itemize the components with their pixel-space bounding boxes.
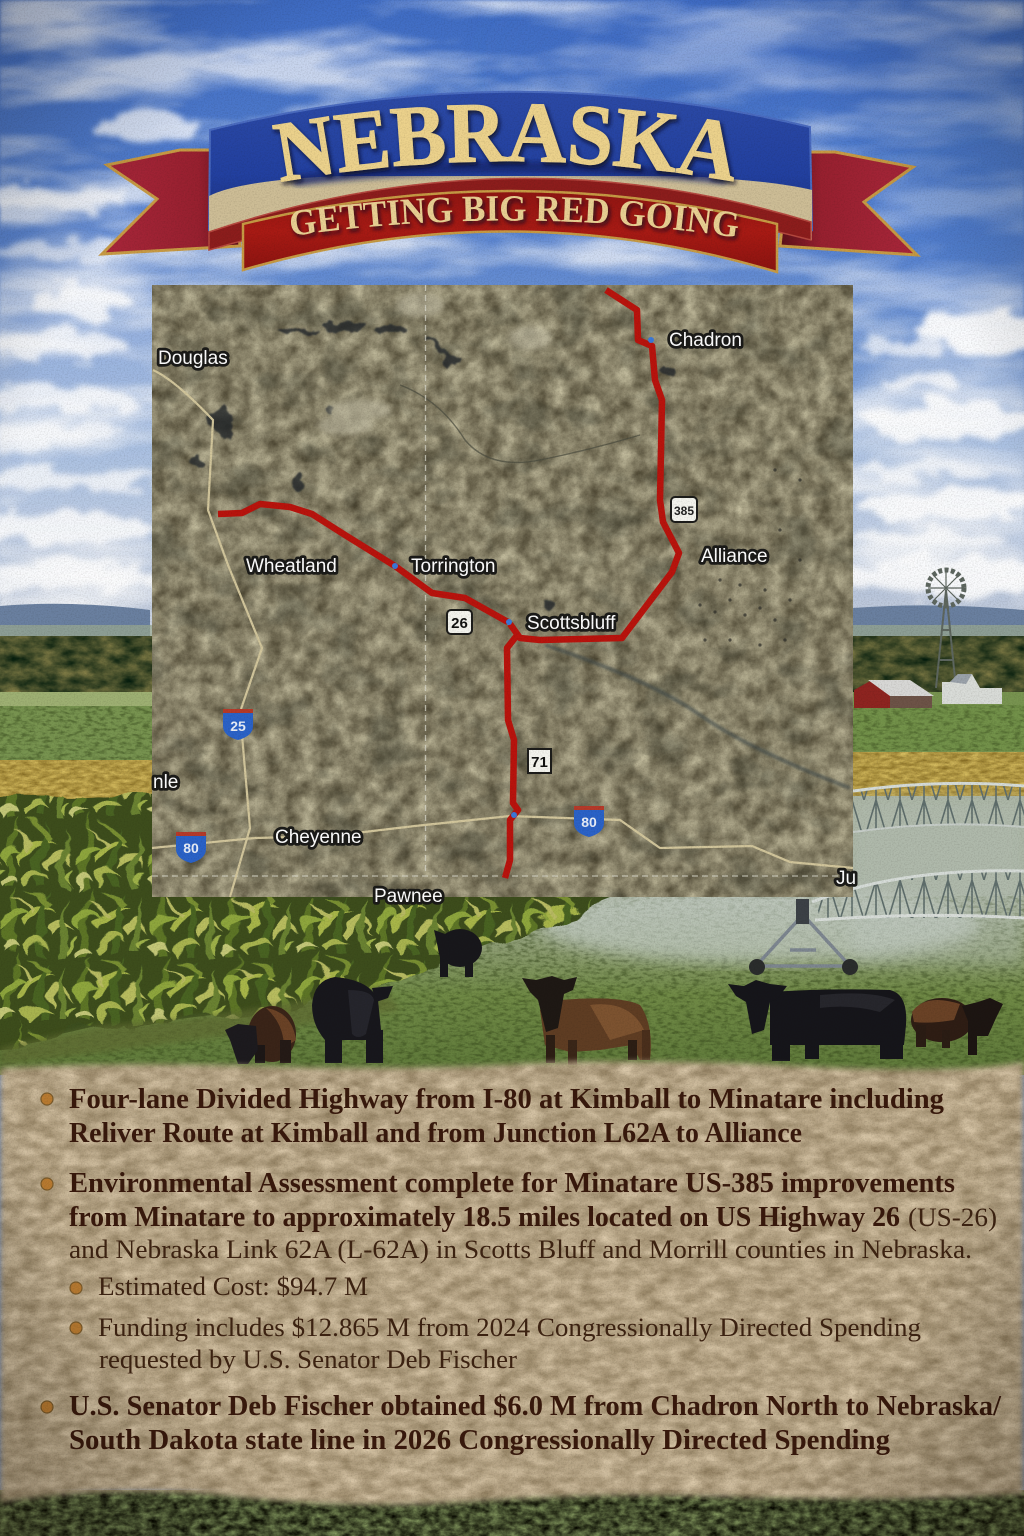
bullet marker [41,1401,53,1413]
small river line [400,385,640,462]
green field and wheat rows [0,692,1024,906]
light terrain patches [317,293,552,435]
text: four-lane highway line 2: Reliver Route at Kimball and from Junction L62A to Alliance [69,1118,802,1149]
shield: Nebraska 71 [528,749,551,773]
label: cropped at left: nle [153,772,178,793]
label: Wheatland: Wheatland [246,556,337,577]
icon: red barn [854,680,934,708]
shield: US-26 [447,610,472,634]
blue arched band [209,92,812,230]
shield: US-385: 385 [674,504,694,518]
distant hills [0,604,1024,640]
shield: US-385 [671,497,697,522]
icon: farmhouse [942,674,1002,704]
text: four-lane highway line 1: Four-lane Divided Highway from I-80 at Kimball to Minatare including [69,1084,944,1115]
near truss [812,870,1024,920]
red rim strip [209,178,811,250]
bottom grass strip [0,1490,1024,1536]
text: environmental assessment line 3: and Nebraska Link 62A (L-62A) in Scotts Bluff and Morrill counties in Nebraska. [69,1234,972,1264]
label: cropped Junction: Ju [836,868,856,889]
text: Fischer funding line 2: South Dakota state line in 2026 Congressionally Directed Spending [69,1425,890,1456]
cow: small brown calf [225,1006,296,1064]
far truss [853,783,1024,832]
bullet list item 1 [41,1084,944,1149]
center pivot irrigation [749,783,1024,975]
satellite terrain [152,285,853,897]
label: Scottsbluff: Scottsbluff [527,613,616,634]
shield: Nebraska 71: 71 [531,754,548,771]
farm: barn, house and windmill [854,570,1002,708]
title banner [98,90,921,274]
ribbon tail right [780,152,917,255]
label: Torrington: Torrington [411,556,496,577]
darker terrain mottling [152,285,853,897]
text: US-26 parenthetical: (US-26) [908,1202,997,1232]
route: Scottsbluff to Chadron [510,290,679,640]
dry creek diagonal [545,645,850,788]
state borders [152,285,853,876]
shield: I-80 west [176,832,206,863]
shield: I-25 [223,709,253,740]
route: Wheatland to Scottsbluff [218,504,508,622]
meadow with mist [0,800,1024,1075]
sky background [0,0,1024,640]
label: Alliance: Alliance [701,546,768,567]
cow: large black side-on [728,980,906,1061]
shield: I-80 east: 80 [581,814,597,830]
bullet marker [41,1178,53,1190]
cow: black front-facing [312,977,393,1063]
interstate roads [152,370,853,897]
cow: distant black [434,929,482,977]
shadow below title on blue [290,161,730,186]
subtitle: GETTING BIG RED GOING: GETTING BIG RED GOING [290,196,742,242]
sub-bullet: funding [70,1312,921,1374]
speckled fields near Alliance [698,468,802,647]
bullet list item 2 [41,1168,997,1264]
cloud banks left and right [0,110,1024,598]
bullet list item 3 [41,1391,1002,1456]
sub-bullet: funding: requested by U.S. Senator Deb Fischer [99,1344,517,1374]
panel: parchment text area [0,1061,1024,1505]
text: environmental assessment line 2: from Minatare to approximately 18.5 miles located on US Highway 26 [69,1202,900,1233]
tree line [0,636,1024,698]
red banner [243,191,777,272]
sub-bullet: funding: Funding includes $12.865 M from 2024 Congressionally Directed Spending [98,1312,921,1342]
label: Pawnee: Pawnee [374,886,443,907]
label: Douglas: Douglas [158,348,228,369]
cattle herd [225,929,1003,1065]
shield: I-25: 25 [230,718,246,734]
pivot tower [749,899,858,975]
text: Fischer funding line 1: U.S. Senator Deb Fischer obtained $6.0 M from Chadron North to Nebraska/ [69,1391,1002,1422]
bullet marker [41,1093,53,1105]
corn field [0,790,630,1065]
terrain dark features [188,322,676,608]
cow: brown standing [522,976,651,1065]
text: environmental assessment line 1: Environmental Assessment complete for Minatare US-385 improvements [69,1168,955,1199]
sub-bullet: estimated cost: Estimated Cost: $94.7 M [98,1271,368,1301]
map panel [152,285,856,907]
route: Scottsbluff to Interstate 80 [505,634,518,878]
ribbon tail left [102,150,240,254]
icon: windmill [928,570,964,688]
cow: small brown at right [911,998,1003,1055]
label: Cheyenne: Cheyenne [275,827,362,848]
city markers [392,337,654,818]
cream under-band [209,176,812,240]
title: NEBRASKA: NEBRASKA [272,104,739,188]
label: Chadron: Chadron [669,330,742,351]
shield: I-80 east [574,806,604,837]
shield: US-26: 26 [451,615,468,632]
shield: I-80 west: 80 [183,840,199,856]
